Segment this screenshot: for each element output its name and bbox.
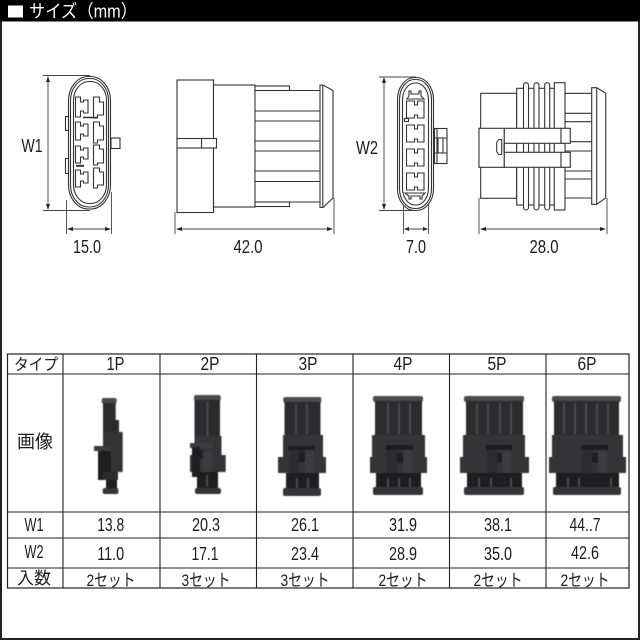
W1 values: 44..7 bbox=[570, 515, 600, 535]
28.0 dimension: 28.0 bbox=[530, 237, 558, 257]
spec table bbox=[8, 354, 629, 590]
W2 values bbox=[97, 543, 599, 564]
column headers: 6P bbox=[578, 354, 596, 374]
connector face W1 bbox=[66, 76, 120, 209]
7.0 dimension: 7.0 bbox=[406, 237, 426, 257]
set count values: 3セット bbox=[182, 571, 230, 590]
photo: 6P connector bbox=[549, 396, 626, 495]
side view drawing 28.0 bbox=[479, 83, 607, 257]
row labels: W1 bbox=[24, 515, 44, 535]
column headers bbox=[106, 354, 596, 374]
heading: サイズ（mm） bbox=[29, 2, 137, 22]
column headers: 4P bbox=[394, 354, 412, 374]
W2 values: 11.0 bbox=[97, 544, 124, 564]
row labels: タイプ bbox=[14, 356, 58, 374]
W1 dimension: W1 bbox=[22, 136, 42, 156]
set count values: 2セット bbox=[474, 571, 522, 590]
W1 values: 13.8 bbox=[97, 515, 124, 535]
15.0 dimension bbox=[66, 192, 112, 257]
column headers: 5P bbox=[488, 354, 506, 374]
front view W1 drawing bbox=[22, 76, 120, 257]
W2 values: 28.9 bbox=[389, 544, 417, 564]
header bar bbox=[0, 0, 640, 22]
W2 dimension bbox=[356, 77, 416, 210]
row labels: W2 bbox=[24, 542, 44, 562]
42.0 dimension: 42.0 bbox=[234, 237, 262, 257]
column headers: 1P bbox=[106, 354, 124, 374]
42.0 dimension bbox=[175, 198, 334, 257]
W1 values: 26.1 bbox=[291, 515, 319, 535]
set count values: 3セット bbox=[280, 571, 330, 590]
28.0 dimension bbox=[479, 198, 607, 257]
set count values: 2セット bbox=[560, 571, 610, 590]
side view drawing 42.0 bbox=[175, 80, 334, 257]
row labels: 画像 bbox=[17, 432, 53, 452]
15.0 dimension: 15.0 bbox=[73, 237, 101, 257]
front view W2 drawing bbox=[356, 77, 447, 257]
set count values bbox=[86, 571, 610, 590]
photo: 4P connector bbox=[370, 396, 427, 495]
W2 values: 42.6 bbox=[571, 543, 599, 563]
photo: 1P connector bbox=[94, 398, 123, 494]
row labels: 入数 bbox=[17, 569, 51, 588]
row labels bbox=[14, 356, 58, 588]
W2 dimension: W2 bbox=[356, 138, 378, 158]
photo: 5P connector bbox=[460, 396, 529, 495]
W1 values: 31.9 bbox=[389, 515, 417, 535]
set count values: 2セット bbox=[86, 571, 136, 590]
photo: 2P connector bbox=[190, 395, 226, 494]
W1 values: 20.3 bbox=[192, 515, 220, 535]
W1 values bbox=[97, 515, 600, 535]
W2 values: 35.0 bbox=[484, 544, 512, 564]
column headers: 3P bbox=[298, 354, 318, 374]
table grid bbox=[8, 354, 629, 588]
header square icon bbox=[8, 6, 23, 18]
W2 values: 23.4 bbox=[291, 544, 319, 564]
photo: 3P connector bbox=[278, 397, 326, 496]
set count values: 2セット bbox=[378, 571, 428, 590]
column headers: 2P bbox=[200, 354, 220, 374]
connector face W2 bbox=[398, 78, 447, 210]
W1 values: 38.1 bbox=[484, 515, 512, 535]
W2 values: 17.1 bbox=[192, 544, 218, 564]
W1 dimension bbox=[22, 76, 90, 210]
7.0 dimension bbox=[404, 205, 428, 257]
